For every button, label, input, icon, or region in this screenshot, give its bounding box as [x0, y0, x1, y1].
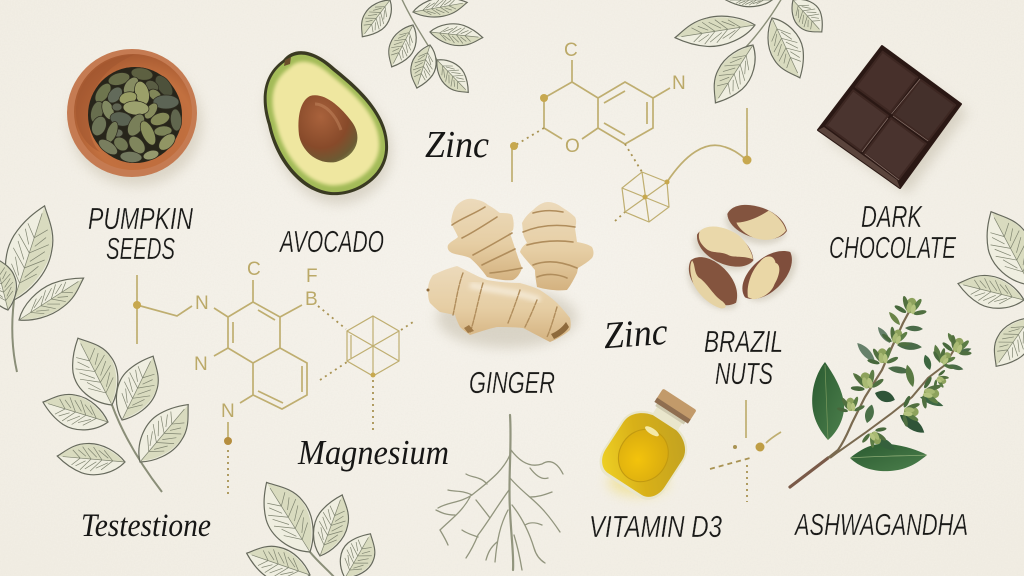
- illustration: roots: [436, 415, 563, 570]
- nut 3: [676, 248, 750, 320]
- large leaf lower: [850, 444, 927, 471]
- label: Magnesium: Magnesium: [297, 433, 449, 472]
- ginger left lobe: [448, 199, 522, 280]
- illustration: leaf sprig, top centre: [353, 0, 484, 100]
- label: VITAMIN D3: VITAMIN D3: [589, 509, 722, 544]
- food: avocado half: [264, 51, 391, 204]
- molecule diagram: lower right fragment: [710, 400, 781, 502]
- label: Zinc upper: Zinc: [425, 124, 489, 166]
- label: BRAZIL NUTS: [704, 324, 783, 391]
- label: DARK CHOCOLATE: DARK: [861, 199, 923, 234]
- food: vitamin D3 oil bottle: [592, 379, 711, 507]
- molecule diagram: Magnesium left: [133, 259, 416, 496]
- label: Zinc lower: Zinc: [602, 311, 669, 357]
- narrow leaflets: [851, 310, 972, 453]
- ginger main body: [426, 266, 571, 342]
- label: GINGER: GINGER: [469, 365, 555, 400]
- molecule diagram: Magnesium left: N: [195, 293, 209, 314]
- label: PUMPKIN SEEDS: SEEDS: [106, 231, 175, 266]
- illustration: leaf sprig, top right: [673, 0, 832, 112]
- illustration: leaf sprig above Testestione: [38, 328, 202, 492]
- food: pumpkin seeds in clay bowl: [67, 49, 202, 186]
- ginger right lobe: [520, 202, 594, 290]
- molecule diagram: Magnesium left: N: [221, 401, 235, 422]
- molecule diagram: Magnesium left: F: [306, 266, 318, 287]
- label: BRAZIL NUTS: BRAZIL: [704, 324, 783, 359]
- molecule diagram: Zinc upper: O: [565, 136, 580, 157]
- molecule diagram: Zinc upper: C: [564, 40, 578, 61]
- illustration: leaf sprig, bottom centre-left: [241, 471, 384, 576]
- food: brazil nuts: [676, 199, 806, 320]
- nut 2: [687, 218, 761, 279]
- molecule diagram: Zinc upper: N: [672, 73, 686, 94]
- food: dark chocolate: [818, 46, 968, 194]
- label: DARK CHOCOLATE: [829, 199, 956, 265]
- molecule diagram: Magnesium left: N: [194, 354, 208, 375]
- illustration: leaf sprig, right edge: [954, 202, 1024, 376]
- molecule diagram: Magnesium left: C: [247, 259, 261, 280]
- label: Testestione: Testestione: [81, 508, 211, 544]
- molecule diagram: Magnesium left: B: [305, 289, 318, 310]
- label: DARK CHOCOLATE: CHOCOLATE: [829, 230, 956, 265]
- pumpkin seeds: [88, 66, 182, 163]
- illustration: leaf sprig, left edge: [0, 199, 91, 372]
- label: BRAZIL NUTS: NUTS: [715, 356, 773, 391]
- label: PUMPKIN SEEDS: [88, 201, 193, 266]
- label: PUMPKIN SEEDS: PUMPKIN: [88, 201, 193, 236]
- avocado pit: [298, 95, 357, 162]
- food: ashwagandha sprig: [790, 294, 976, 487]
- label: AVOCADO: AVOCADO: [279, 224, 384, 259]
- nut 1: [721, 199, 791, 251]
- large leaf upper: [812, 362, 844, 440]
- nut 4: [734, 239, 806, 312]
- food: ginger root: [426, 199, 594, 348]
- molecule diagram: Zinc upper: [510, 40, 752, 222]
